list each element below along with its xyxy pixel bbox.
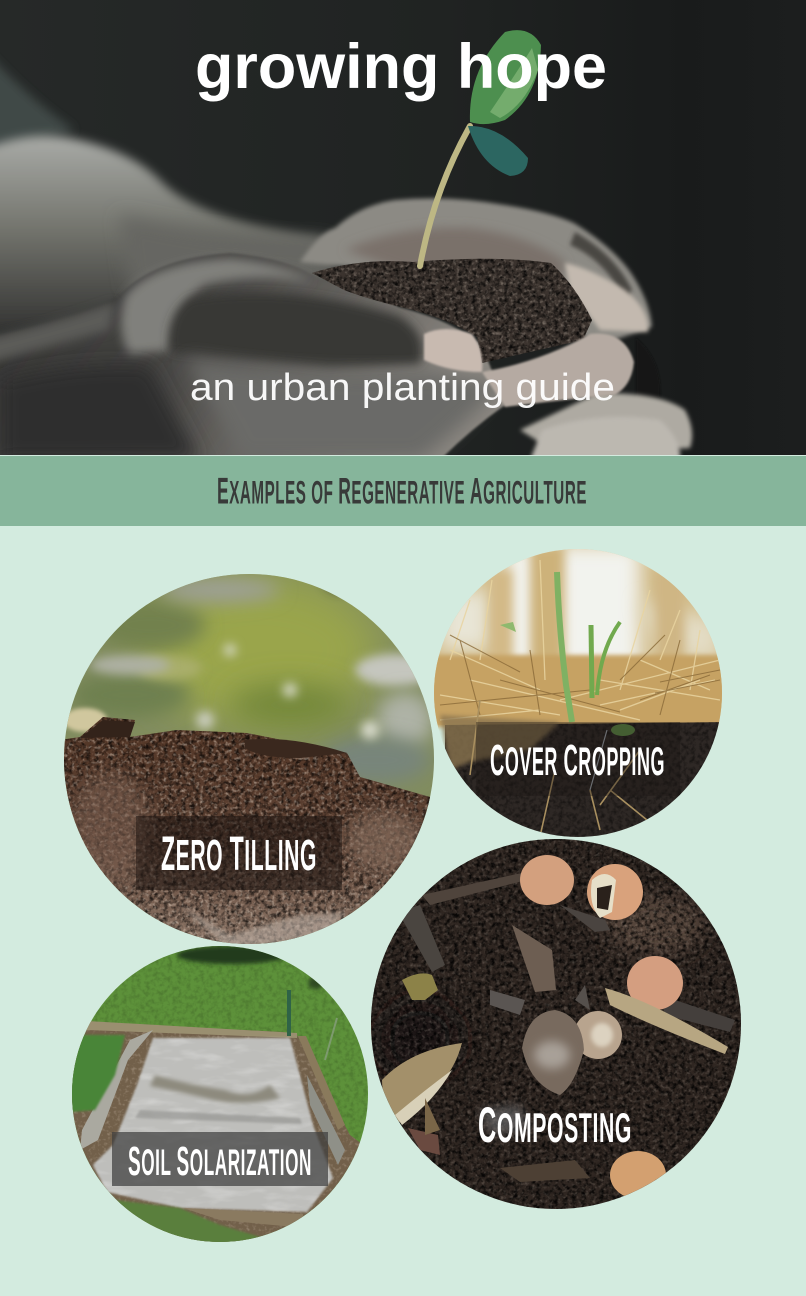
banner heading: EXAMPLES OF REGENERATIVE AGRICULTURE [217, 470, 587, 512]
panel: composting [365, 835, 745, 1215]
icon: seedling [420, 30, 541, 266]
icon: eggshells [520, 855, 683, 1199]
icon: soil [312, 259, 592, 363]
label box: soil solarization [112, 1132, 328, 1186]
panel: hero photo of hands holding a seedling [0, 0, 806, 460]
label box: zero tilling [136, 816, 342, 890]
panel: soil solarization [70, 945, 370, 1250]
icon: thumbnail [424, 329, 482, 372]
plastic sheet [93, 1038, 333, 1212]
icon: curled finger [482, 334, 634, 407]
title: growing hope [195, 32, 607, 102]
subtitle: an urban planting guide [190, 367, 615, 409]
label: composting: COMPOSTING [478, 1097, 632, 1153]
panel: cover cropping [430, 545, 730, 845]
left hand [0, 253, 505, 460]
banner [0, 456, 806, 526]
lower fingers [520, 393, 692, 455]
label: zero tilling: ZERO TILLING [161, 828, 317, 881]
label: soil solarization: SOIL SOLARIZATION [128, 1138, 312, 1184]
panel: zero tilling [60, 568, 445, 950]
label: cover cropping: COVER CROPPING [490, 736, 665, 785]
label box: cover cropping [476, 722, 680, 796]
